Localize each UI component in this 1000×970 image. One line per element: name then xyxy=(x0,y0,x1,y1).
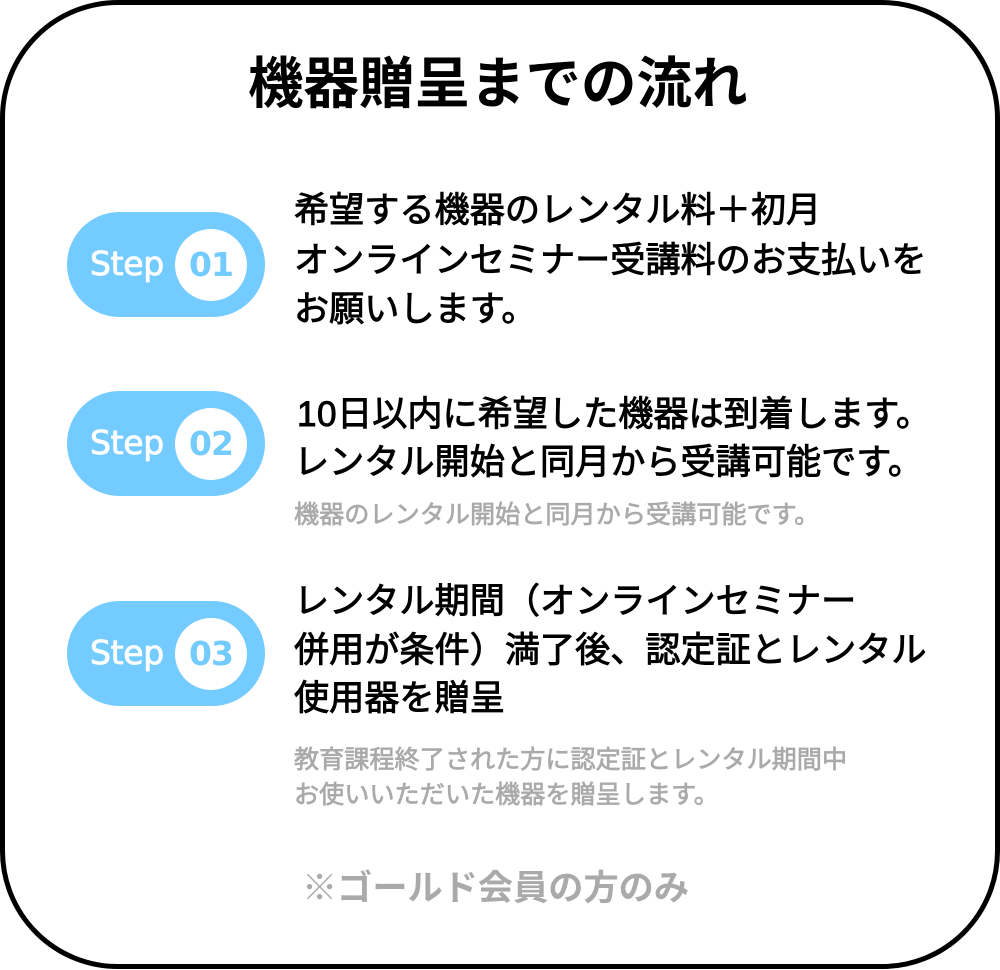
step 2 text: レンタル開始と同月から受講可能です。 xyxy=(294,443,923,482)
step 3 label: Step xyxy=(90,633,164,672)
step 1 text: 希望する機器のレンタル料＋初月 xyxy=(294,191,821,230)
step 1 number: 01 xyxy=(189,245,233,284)
step 1 badge xyxy=(67,212,265,317)
step 3 text xyxy=(294,582,927,718)
step 2 text xyxy=(294,395,931,482)
step 2 note: 機器のレンタル開始と同月から受講可能です。 xyxy=(294,501,819,529)
step 2 number: 02 xyxy=(189,424,233,463)
footnote: ※ゴールド会員の方のみ xyxy=(302,869,689,908)
step 3 note: お使いいただいた機器を贈呈します。 xyxy=(294,781,719,809)
step 1 number xyxy=(175,229,247,301)
step 2 text: 10日以内に希望した機器は到着します。 xyxy=(297,395,931,434)
step 1 text: お願いします。 xyxy=(294,290,536,329)
step 1 label: Step xyxy=(90,244,164,283)
step 2 label: Step xyxy=(90,423,164,462)
step 3 text: 使用器を贈呈 xyxy=(294,679,505,718)
title: 機器贈呈までの流れ xyxy=(248,53,748,115)
step 3 text: 併用が条件）満了後、認定証とレンタル xyxy=(294,630,927,670)
step 1 text xyxy=(294,191,927,329)
step 2 badge xyxy=(67,391,265,496)
step 2 number xyxy=(175,408,247,480)
step 1 text: オンラインセミナー受講料のお支払いを xyxy=(294,241,927,280)
step 3 number xyxy=(175,618,247,690)
step 3 badge xyxy=(67,601,265,706)
step 3 number: 03 xyxy=(189,634,233,673)
step 3 note: 教育課程終了された方に認定証とレンタル期間中 xyxy=(294,746,847,774)
step 3 text: レンタル期間（オンラインセミナー xyxy=(294,582,856,621)
step 3 note xyxy=(294,746,847,809)
